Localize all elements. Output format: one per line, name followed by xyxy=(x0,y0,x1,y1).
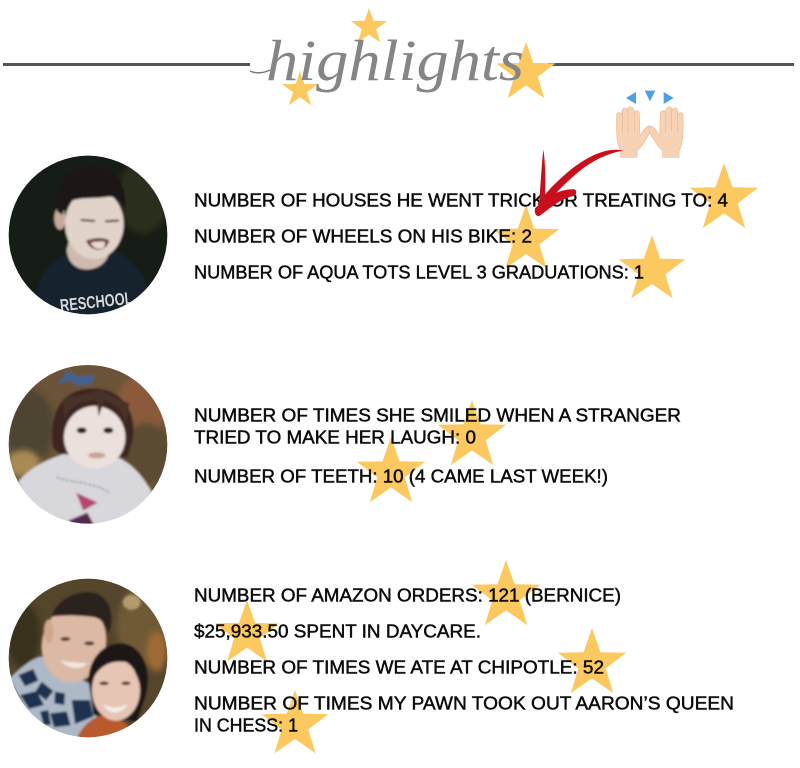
stat: houses: NUMBER OF HOUSES HE WENT TRICK OR TREATING TO: 4 xyxy=(194,190,728,210)
star: near teeth count xyxy=(357,437,425,502)
star: near chess xyxy=(262,690,328,753)
stat: chess: IN CHESS: 1 xyxy=(194,716,298,736)
stat: smiles: NUMBER OF TIMES SHE SMILED WHEN A STRANGER xyxy=(194,406,681,426)
star: right of title xyxy=(496,42,556,98)
stat: chipotle: NUMBER OF TIMES WE ATE AT CHIPOTLE: 52 xyxy=(194,658,604,678)
photo: boy xyxy=(7,153,170,317)
stat: wheels: NUMBER OF WHEELS ON HIS BIKE: 2 xyxy=(194,226,532,246)
heading rule: right xyxy=(548,63,794,66)
star: near daycare xyxy=(215,600,279,662)
arrow: red hand-drawn xyxy=(535,149,623,216)
star: top of title xyxy=(351,8,387,42)
text block: boy stats xyxy=(194,190,728,282)
icon: blue sparkle triangles xyxy=(626,91,674,104)
stat: teeth: NUMBER OF TEETH: 10 (4 CAME LAST WEEK!) xyxy=(194,466,608,486)
text block: parents stats xyxy=(194,586,734,736)
star: near wheels count xyxy=(493,205,559,268)
photo: parents xyxy=(7,577,170,742)
stat: amazon: NUMBER OF AMAZON ORDERS: 121 (BERNICE) xyxy=(194,586,621,606)
stat: daycare: $25,933.50 SPENT IN DAYCARE. xyxy=(194,622,481,642)
stat: chess xyxy=(194,694,734,736)
text block: girl stats xyxy=(194,406,681,486)
stat: aqua tots: NUMBER OF AQUA TOTS LEVEL 3 GRADUATIONS: 1 xyxy=(194,262,644,282)
star: near smiled text xyxy=(438,400,506,465)
title: highlights xyxy=(266,28,524,93)
star: near graduations count xyxy=(619,235,685,298)
icon: raised hands xyxy=(616,91,683,157)
stat: smiles: TRIED TO MAKE HER LAUGH: 0 xyxy=(194,428,476,448)
photo: boy: RESCHOOL xyxy=(59,288,134,315)
star: near houses count xyxy=(690,163,758,228)
star: near chipotle xyxy=(558,628,626,693)
stat: chess: NUMBER OF TIMES MY PAWN TOOK OUT AARON’S QUEEN xyxy=(194,694,734,714)
star: near amazon orders xyxy=(472,560,540,625)
photo: baby girl xyxy=(7,363,170,527)
stat: smiles xyxy=(194,406,681,448)
star: lower left of title xyxy=(282,71,318,105)
heading rule: left xyxy=(3,63,250,66)
